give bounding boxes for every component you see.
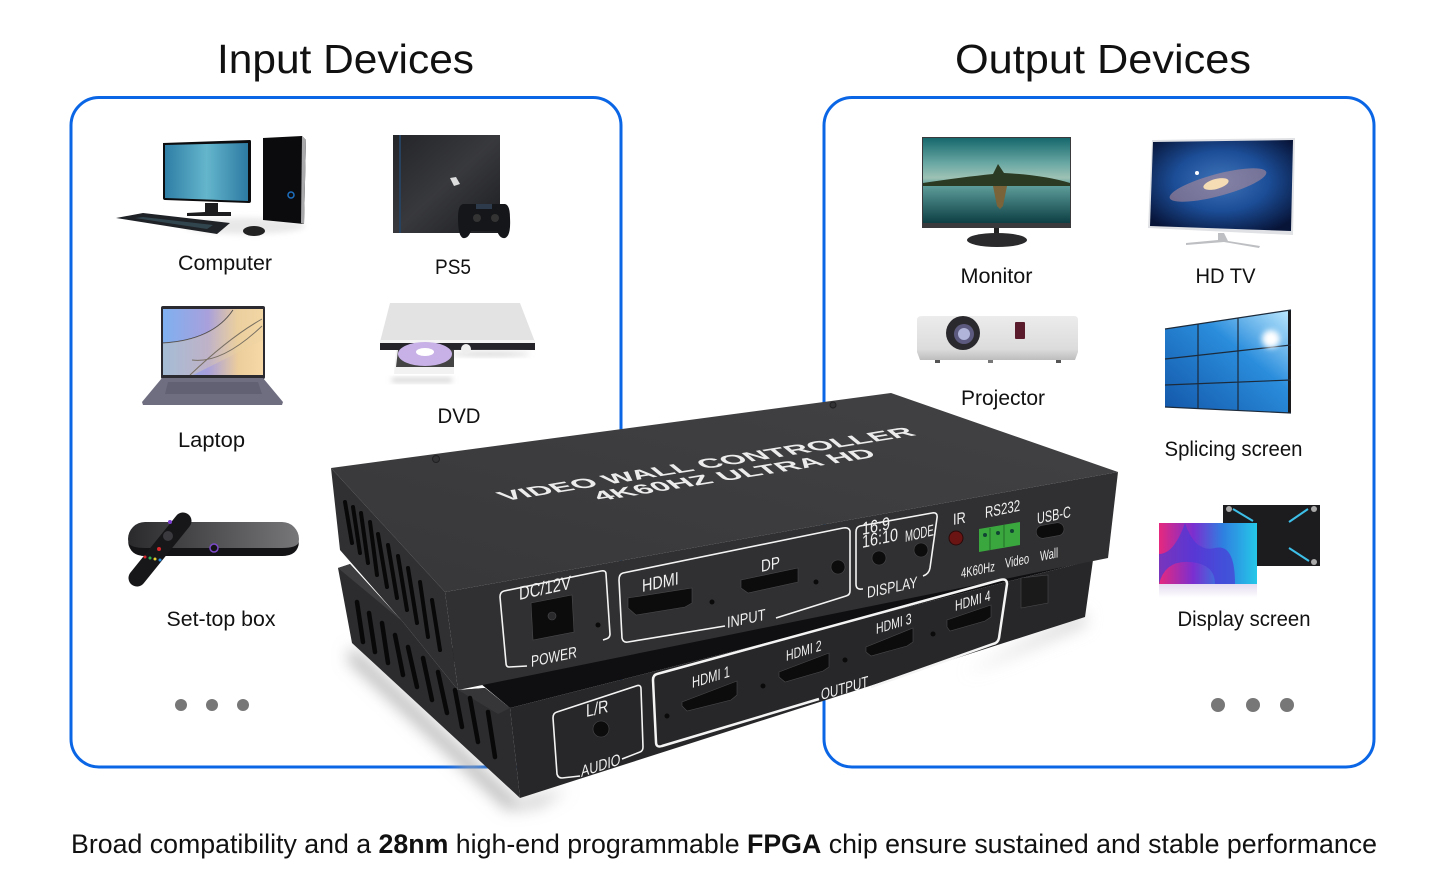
pagination dots: input bbox=[175, 699, 249, 711]
port labels: 16:10 bbox=[862, 525, 898, 552]
port labels: 4K60Hz bbox=[961, 558, 995, 581]
port labels: DC/12V bbox=[519, 571, 571, 604]
port labels: Wall bbox=[1040, 544, 1058, 564]
panel: input devices bbox=[71, 98, 621, 767]
port labels: HDMI 1 bbox=[692, 662, 730, 691]
port labels: MODE bbox=[905, 521, 934, 546]
icon: set-top box with remote bbox=[128, 520, 299, 578]
upper unit bbox=[331, 393, 1118, 690]
port labels bbox=[519, 496, 1071, 781]
port labels: USB-C bbox=[1037, 503, 1071, 527]
ports bbox=[531, 522, 1065, 737]
port labels: OUTPUT bbox=[821, 672, 869, 703]
video wall controller device bbox=[331, 393, 1118, 809]
title: Input Devices: Input Devices bbox=[217, 36, 474, 82]
panel: output devices bbox=[824, 98, 1374, 767]
icon: PS5 console bbox=[393, 135, 510, 238]
port labels: HDMI 4 bbox=[955, 587, 991, 614]
icon: DVD player bbox=[380, 303, 535, 382]
port labels: HDMI bbox=[642, 569, 679, 596]
port labels: DISPLAY bbox=[867, 574, 918, 602]
pagination dots: output bbox=[1211, 698, 1294, 712]
lower unit bbox=[338, 535, 1105, 798]
status LED and RS232 terminal bbox=[949, 522, 1020, 552]
bottom caption: Broad compatibility and a 28nm high-end programmable FPGA chip ensure sustained and stable performance bbox=[71, 829, 1377, 859]
port labels: AUDIO bbox=[581, 751, 620, 781]
label: Projector: Projector bbox=[961, 387, 1045, 410]
label: DVD: DVD bbox=[438, 405, 480, 428]
port labels: IR bbox=[953, 509, 966, 529]
icon: laptop bbox=[142, 306, 283, 405]
port labels: 16:9 bbox=[862, 514, 890, 539]
label: HD TV: HD TV bbox=[1196, 265, 1256, 288]
label: Computer: Computer bbox=[178, 252, 272, 275]
port labels: INPUT bbox=[727, 607, 765, 632]
icon: monitor bbox=[922, 137, 1071, 247]
icon: HD TV bbox=[1148, 138, 1295, 248]
product text on top face: 4K60HZ ULTRA HD bbox=[587, 446, 882, 504]
port labels: DP bbox=[761, 554, 780, 576]
title: Output Devices: Output Devices bbox=[955, 36, 1251, 82]
product text on top face: VIDEO WALL CONTROLLER bbox=[492, 425, 921, 504]
label: Monitor: Monitor bbox=[960, 265, 1032, 288]
icon: display screen LED panels bbox=[1159, 505, 1320, 598]
icon: computer bbox=[116, 136, 306, 236]
front panel outlines bbox=[500, 513, 1007, 778]
icon: splicing screen video wall bbox=[1165, 310, 1291, 413]
port labels: HDMI 3 bbox=[876, 610, 912, 637]
label: Splicing screen: Splicing screen bbox=[1164, 438, 1302, 461]
label: PS5: PS5 bbox=[435, 256, 471, 279]
label: Display screen: Display screen bbox=[1178, 608, 1310, 631]
small indicator holes bbox=[596, 580, 936, 718]
label: Set-top box: Set-top box bbox=[166, 608, 276, 631]
port labels: POWER bbox=[531, 644, 577, 671]
label: Laptop: Laptop bbox=[178, 429, 245, 452]
port labels: L/R bbox=[586, 697, 608, 721]
icon: projector bbox=[917, 316, 1078, 363]
port labels: Video bbox=[1005, 550, 1029, 571]
port labels: HDMI 2 bbox=[786, 637, 822, 664]
port labels: RS232 bbox=[985, 496, 1020, 521]
